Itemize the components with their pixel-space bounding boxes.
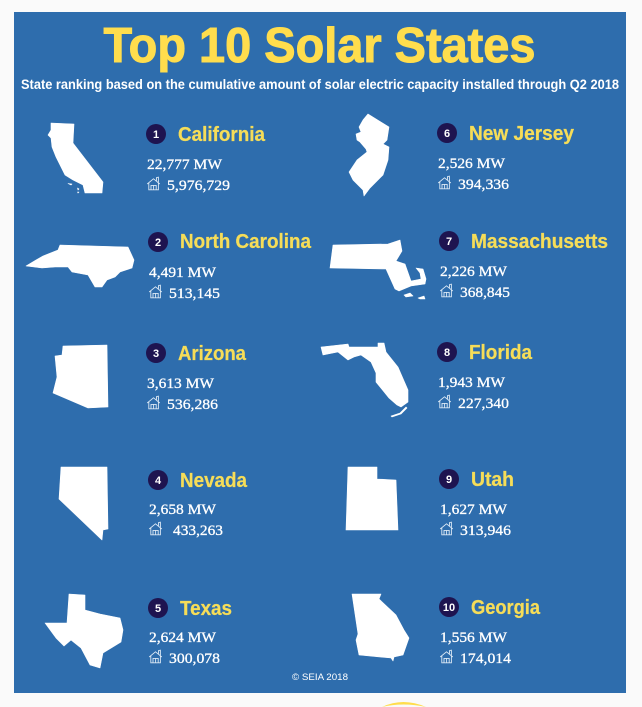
homes count: 433,263 xyxy=(173,523,223,539)
icon: North Carolina map xyxy=(26,245,134,287)
capacity: 1,627 MW xyxy=(440,502,508,518)
rank badge 8 xyxy=(437,342,457,362)
icon: New Jersey map xyxy=(349,114,389,196)
entry: California xyxy=(48,123,266,194)
icon: house xyxy=(147,396,160,409)
homes count: 227,340 xyxy=(458,396,509,412)
entry: Utah xyxy=(346,467,514,539)
icon: house xyxy=(147,177,160,190)
homes count: 313,946 xyxy=(460,523,512,539)
icon: house xyxy=(149,285,162,298)
rank badge 5: 5 xyxy=(155,603,161,615)
rank badge 7 xyxy=(439,231,459,251)
icon: house xyxy=(440,284,453,297)
state name: New Jersey xyxy=(469,123,575,145)
rank badge 1 xyxy=(146,124,166,144)
logo arc at bottom edge xyxy=(382,702,426,707)
capacity: 2,226 MW xyxy=(440,264,508,280)
rank badge 10 xyxy=(439,597,459,617)
rank badge 9 xyxy=(439,469,459,489)
icon: Texas map xyxy=(45,594,123,668)
icon: house xyxy=(149,650,162,663)
homes count: 536,286 xyxy=(167,397,219,413)
icon: Nevada map xyxy=(59,467,108,540)
icon: house xyxy=(149,522,162,535)
rank badge 2 xyxy=(148,232,168,252)
homes count: 513,145 xyxy=(169,286,220,302)
capacity: 2,624 MW xyxy=(149,630,217,646)
rank badge 3 xyxy=(146,343,166,363)
rank badge 4 xyxy=(148,470,168,490)
homes count: 300,078 xyxy=(169,651,220,667)
rank badge 6 xyxy=(437,123,457,143)
entry: Nevada xyxy=(59,467,248,540)
capacity: 1,943 MW xyxy=(438,375,506,391)
entry: Georgia xyxy=(352,594,541,667)
capacity: 1,556 MW xyxy=(440,630,508,646)
state name: Texas xyxy=(180,598,232,620)
icon: Georgia map xyxy=(352,594,409,661)
icon: Utah map xyxy=(346,467,398,530)
state name: Utah xyxy=(471,469,514,491)
copyright: © SEIA 2018 xyxy=(292,672,348,682)
capacity: 2,658 MW xyxy=(149,502,217,518)
capacity: 3,613 MW xyxy=(147,376,215,392)
icon: house xyxy=(440,522,453,535)
rank badge 9: 9 xyxy=(446,474,452,486)
homes count: 174,014 xyxy=(460,651,512,667)
rank badge 8: 8 xyxy=(444,347,450,359)
entry: North Carolina xyxy=(26,231,312,302)
state name: California xyxy=(178,124,266,146)
homes count: 394,336 xyxy=(458,177,510,193)
entry: Arizona xyxy=(53,343,247,413)
icon: Massachusetts map xyxy=(330,240,426,299)
rank badge 10: 10 xyxy=(443,602,455,614)
state name: Massachusetts xyxy=(471,231,608,253)
capacity: 22,777 MW xyxy=(147,157,223,173)
icon: house xyxy=(438,176,451,189)
title: Top 10 Solar States xyxy=(104,19,536,73)
icon: Florida map xyxy=(321,343,408,417)
rank badge 5 xyxy=(148,598,168,618)
capacity: 2,526 MW xyxy=(438,156,506,172)
state name: Florida xyxy=(469,342,533,364)
rank badge 3: 3 xyxy=(153,348,159,360)
icon: house xyxy=(438,395,451,408)
entry: New Jersey xyxy=(349,114,575,196)
homes count: 5,976,729 xyxy=(167,178,230,194)
state name: Nevada xyxy=(180,470,248,492)
entry: Florida xyxy=(321,342,533,417)
rank badge 6: 6 xyxy=(444,128,450,140)
state name: Georgia xyxy=(471,597,541,619)
icon: California map xyxy=(48,123,103,193)
state name: North Carolina xyxy=(180,231,312,253)
state name: Arizona xyxy=(178,343,247,365)
capacity: 4,491 MW xyxy=(149,265,217,281)
icon: Arizona map xyxy=(53,345,108,408)
homes count: 368,845 xyxy=(460,285,510,301)
rank badge 4: 4 xyxy=(155,475,162,487)
icon: house xyxy=(440,650,453,663)
rank badge 7: 7 xyxy=(446,236,452,248)
entry: Texas xyxy=(45,594,232,668)
entry: Massachusetts xyxy=(330,231,608,301)
rank badge 1: 1 xyxy=(153,129,159,141)
rank badge 2: 2 xyxy=(155,237,161,249)
